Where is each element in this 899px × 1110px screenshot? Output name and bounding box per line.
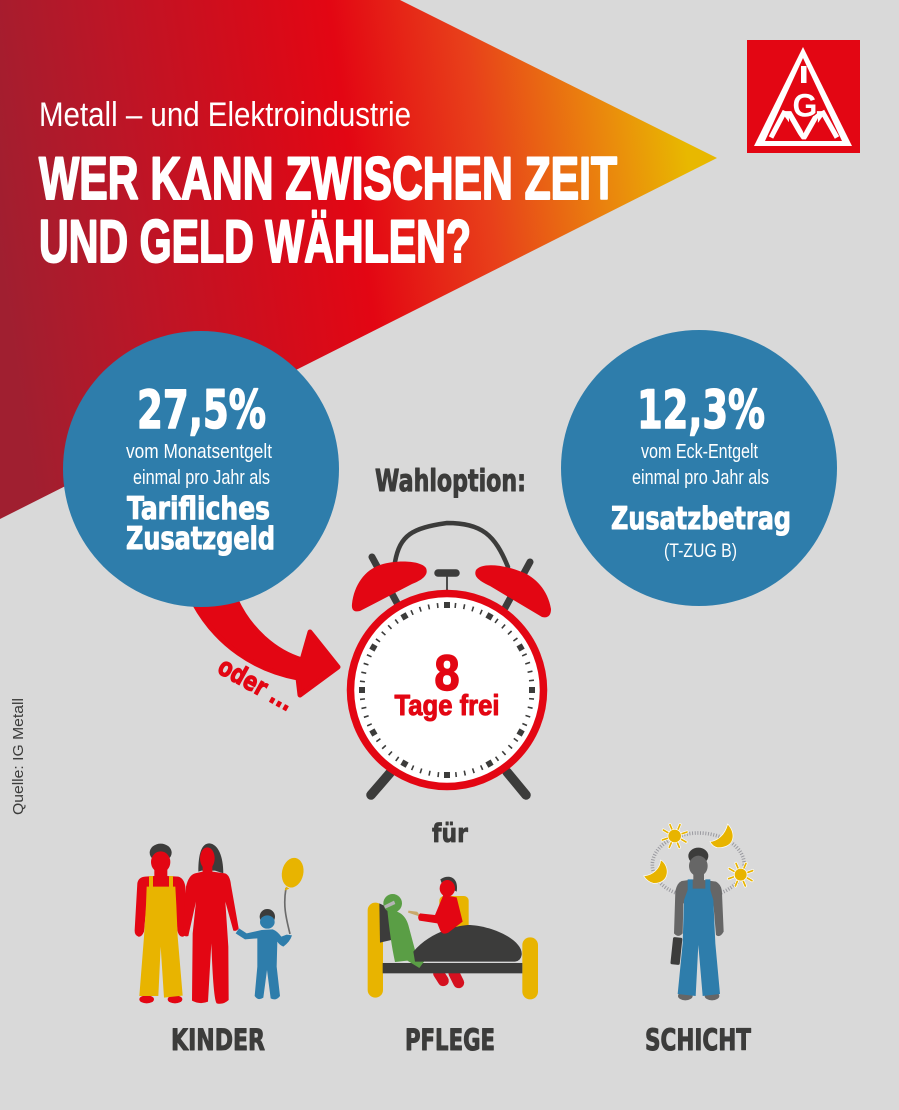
- panel: right circle: vom Eck-Entgelt: [641, 441, 758, 463]
- panel: left circle: 27,5%: [137, 380, 266, 441]
- panel: right circle: 12,3%: [637, 380, 765, 441]
- panel: left circle: Zusatzgeld: [126, 521, 275, 557]
- clock text: Tage frei: [394, 690, 500, 722]
- panel: right circle: einmal pro Jahr als: [632, 467, 769, 489]
- label: für: für: [432, 819, 468, 849]
- header triangle: [0, 0, 717, 519]
- source: Quelle: IG Metall: [10, 698, 27, 815]
- title: UND GELD WÄHLEN?: [39, 208, 471, 275]
- sun: [662, 825, 687, 847]
- icon: care bed: [368, 877, 538, 999]
- arrow: [194, 600, 338, 695]
- label: Pflege: PFLEGE: [405, 1023, 495, 1057]
- panel: right circle: (T-ZUG B): [664, 541, 737, 562]
- subtitle: Metall – und Elektroindustrie: [39, 96, 411, 134]
- icon: family: [135, 843, 306, 1004]
- logo: IG Metall: G: [793, 88, 817, 124]
- label: Kinder: KINDER: [171, 1023, 265, 1057]
- clock ticks: [327, 570, 567, 810]
- logo: IG Metall: [747, 40, 860, 153]
- moon: [710, 824, 733, 848]
- panel: left circle: Tarifliches: [127, 491, 270, 527]
- panel: right circle: Zusatzbetrag: [611, 501, 791, 537]
- title: [39, 145, 617, 275]
- logo: IG Metall: M: [778, 104, 828, 148]
- panel: right circle: [561, 330, 837, 606]
- panel: left circle: vom Monatsentgelt: [126, 441, 272, 463]
- panel: left circle: [63, 331, 339, 607]
- label: Schicht: SCHICHT: [645, 1023, 751, 1057]
- clock text: [394, 645, 500, 722]
- icon: alarm clock: [327, 523, 567, 810]
- panel: left circle: einmal pro Jahr als: [133, 467, 270, 489]
- sun: [729, 863, 753, 886]
- moon: [644, 860, 667, 883]
- heading: Wahloption: Wahloption:: [375, 464, 526, 499]
- title: WER KANN ZWISCHEN ZEIT: [39, 145, 617, 212]
- clock text: 8: [434, 645, 460, 701]
- icon: shift worker: [644, 824, 753, 1000]
- label: oder: oder ...: [213, 652, 299, 718]
